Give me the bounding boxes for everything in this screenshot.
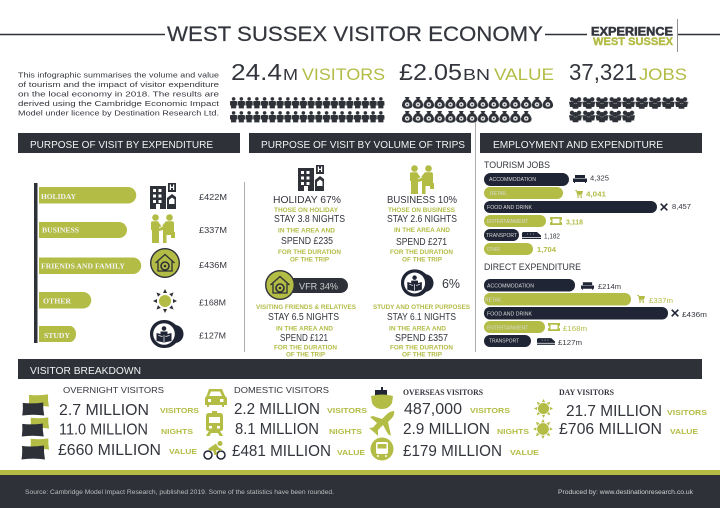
icon: hotel bbox=[298, 165, 324, 191]
overnight visitors: 2.7 MILLION bbox=[59, 402, 149, 419]
intro text bbox=[18, 70, 219, 118]
spend bar: accommodation: £214m bbox=[598, 282, 621, 291]
stat: visitors: M bbox=[283, 67, 298, 84]
icon: business bbox=[410, 165, 434, 194]
intro text: of tourism and the impact of visitor expenditure bbox=[18, 80, 219, 89]
job bar: accommodation bbox=[484, 173, 609, 186]
day visitors: DAY VISITORS bbox=[559, 387, 614, 397]
spend bar: entertainment: ENTERTAINMENT bbox=[487, 326, 529, 332]
stat: value: BN bbox=[463, 67, 490, 84]
bar: friends and family: FRIENDS AND FAMILY bbox=[41, 262, 126, 270]
business text: THOSE ON BUSINESS bbox=[388, 207, 455, 214]
job bar: transport bbox=[484, 229, 560, 241]
value: business: £337M bbox=[199, 225, 227, 235]
VFR text: STAY 6.5 NIGHTS bbox=[268, 312, 339, 323]
value: holiday: £422M bbox=[199, 192, 227, 202]
day visitors: VISITORS bbox=[667, 408, 707, 417]
holiday text: SPEND £235 bbox=[281, 236, 333, 247]
spend bar: food and drink: FOOD AND DRINK bbox=[487, 312, 533, 318]
domestic visitors bbox=[232, 385, 367, 460]
icon rows: staff groups bbox=[569, 97, 688, 124]
icon: sun bbox=[534, 399, 553, 418]
domestic visitors: £481 MILLION bbox=[232, 443, 331, 460]
icon rows: visitors bbox=[230, 97, 385, 123]
job bar: retail bbox=[484, 187, 606, 199]
stat: jobs bbox=[569, 59, 687, 85]
job bar: other: 1,704 bbox=[537, 245, 557, 254]
job bar: food and drink: 8,457 bbox=[672, 202, 691, 211]
overnight visitors bbox=[58, 385, 199, 459]
job bar: accommodation: 4,325 bbox=[590, 174, 609, 182]
logo: WEST SUSSEX bbox=[593, 36, 674, 48]
overseas visitors: £179 MILLION bbox=[403, 443, 502, 460]
job bar: food and drink: FOOD AND DRINK bbox=[487, 205, 533, 211]
VFR text: OF THE TRIP bbox=[286, 352, 325, 358]
job bar: retail: 4,041 bbox=[586, 190, 606, 198]
spend bar: entertainment: £168m bbox=[563, 324, 587, 333]
overnight visitors: OVERNIGHT VISITORS bbox=[63, 385, 164, 395]
holiday text: STAY 3.8 NIGHTS bbox=[274, 214, 345, 225]
job bar: accommodation: ACCOMMODATION bbox=[489, 177, 536, 183]
producer credit: Produced by: www.destinationresearch.co.uk bbox=[558, 489, 694, 496]
spend bar: entertainment bbox=[484, 321, 587, 333]
stat: visitors: VISITORS bbox=[302, 66, 385, 84]
stat: value: VALUE bbox=[494, 66, 554, 84]
icon: ship bbox=[371, 387, 393, 409]
VFR text: FOR THE DURATION bbox=[274, 344, 338, 352]
business text: SPEND £271 bbox=[396, 237, 447, 248]
VFR text: IN THE AREA AND bbox=[276, 326, 334, 332]
bar: business: BUSINESS bbox=[42, 226, 79, 234]
overnight visitors: £660 MILLION bbox=[58, 442, 161, 459]
overseas visitors: NIGHTS bbox=[497, 427, 529, 436]
domestic visitors: DOMESTIC VISITORS bbox=[234, 385, 329, 395]
VFR text: VISITING FRIENDS & RELATIVES bbox=[256, 304, 356, 311]
panel: employment and expenditure bbox=[480, 133, 707, 347]
stat: jobs: 37,321 bbox=[569, 59, 637, 85]
overseas visitors: VISITORS bbox=[470, 406, 510, 415]
job bar: retail: RETAIL bbox=[490, 191, 507, 197]
domestic visitors: VALUE bbox=[337, 448, 365, 457]
icon: study bbox=[150, 320, 184, 348]
business text bbox=[387, 195, 457, 264]
icon: cyclist bbox=[204, 441, 225, 459]
holiday text: OF THE TRIP bbox=[290, 256, 329, 264]
job bar: other: OTHER bbox=[487, 247, 500, 253]
icons: pillows bbox=[22, 394, 49, 460]
spend bar: transport: £127m bbox=[558, 338, 582, 347]
domestic visitors: NIGHTS bbox=[329, 427, 362, 436]
job bar: entertainment: ENTERTAINMENT bbox=[487, 219, 529, 225]
logo bbox=[591, 26, 674, 48]
overnight visitors: VISITORS bbox=[160, 406, 199, 415]
business text: BUSINESS 10% bbox=[387, 195, 457, 206]
stat: jobs: JOBS bbox=[639, 66, 687, 84]
day visitors: 21.7 MILLION bbox=[566, 403, 662, 420]
heading bbox=[18, 359, 702, 379]
bar: business bbox=[39, 222, 127, 238]
heading bbox=[249, 133, 471, 153]
domestic visitors: 8.1 MILLION bbox=[235, 421, 319, 438]
overseas visitors: VALUE bbox=[510, 448, 539, 457]
study share: 6% bbox=[442, 276, 460, 291]
icon: car bbox=[205, 389, 227, 407]
spend bar: retail: RETAIL bbox=[485, 298, 502, 304]
subheading: direct expenditure: DIRECT EXPENDITURE bbox=[484, 262, 581, 273]
heading: PURPOSE OF VISIT BY EXPENDITURE bbox=[30, 140, 213, 151]
icon: sun bbox=[533, 419, 553, 439]
day visitors: VALUE bbox=[670, 427, 698, 436]
intro text: Model under licence by Destination Research Ltd. bbox=[18, 108, 219, 118]
icon: study bbox=[401, 269, 434, 297]
source note: Source: Cambridge Model Impact Research, published 2019. Some of the statistics have been rounded. bbox=[25, 489, 334, 496]
holiday text: FOR THE DURATION bbox=[278, 249, 342, 256]
job bar: entertainment bbox=[484, 215, 583, 227]
overnight visitors: NIGHTS bbox=[161, 427, 193, 436]
overseas visitors bbox=[403, 387, 539, 460]
holiday text: HOLIDAY 67% bbox=[273, 195, 341, 206]
job bar: food and drink bbox=[484, 201, 691, 213]
spend bar: transport: TRANSPORT bbox=[489, 338, 520, 344]
panel: purpose of visit by volume of trips bbox=[249, 133, 471, 358]
icon: rail circle bbox=[370, 438, 394, 460]
study text bbox=[373, 304, 470, 358]
VFR pill: VFR 34% bbox=[299, 282, 338, 292]
intro text: This infographic summarises the volume and value bbox=[18, 70, 219, 80]
spend bar: food and drink bbox=[484, 307, 707, 320]
stat: value bbox=[399, 59, 554, 85]
spend bar: retail: £337m bbox=[649, 296, 673, 305]
business text: OF THE TRIP bbox=[402, 256, 442, 264]
overseas visitors: OVERSEAS VISITORS bbox=[403, 387, 483, 397]
value: friends and family: £436M bbox=[199, 260, 227, 270]
overnight visitors: VALUE bbox=[169, 447, 197, 456]
spend bar: transport bbox=[484, 335, 582, 347]
VFR text bbox=[256, 304, 356, 358]
bar: friends and family bbox=[39, 258, 141, 274]
stat: visitors bbox=[231, 59, 385, 85]
stat: value: £2.05 bbox=[399, 59, 462, 85]
overnight visitors: 11.0 MILLION bbox=[59, 422, 148, 438]
business text: FOR THE DURATION bbox=[390, 249, 454, 256]
bar: other: OTHER bbox=[43, 296, 72, 306]
heading: EMPLOYMENT AND EXPENDITURE bbox=[493, 140, 663, 151]
domestic visitors: 2.2 MILLION bbox=[234, 401, 320, 418]
value: other: £168M bbox=[199, 298, 226, 308]
business text: IN THE AREA AND bbox=[394, 227, 451, 234]
title: WEST SUSSEX VISITOR ECONOMY bbox=[167, 23, 543, 46]
study text: IN THE AREA AND bbox=[389, 326, 447, 332]
holiday text: THOSE ON HOLIDAY bbox=[274, 207, 339, 214]
footer bbox=[0, 470, 720, 508]
icon: sun bbox=[153, 289, 177, 313]
icon rows: money bags bbox=[402, 97, 554, 124]
VFR text: SPEND £121 bbox=[280, 333, 328, 344]
spend bar: accommodation: ACCOMMODATION bbox=[487, 284, 534, 290]
spend bar: accommodation bbox=[484, 279, 621, 292]
study text: OF THE TRIP bbox=[402, 352, 442, 358]
holiday text: IN THE AREA AND bbox=[278, 228, 336, 234]
icon: home bbox=[150, 248, 180, 278]
holiday text bbox=[273, 195, 345, 264]
day visitors bbox=[559, 387, 707, 438]
spend bar: retail bbox=[484, 293, 673, 306]
heading: VISITOR BREAKDOWN bbox=[30, 366, 141, 377]
stat: visitors: 24.4 bbox=[231, 59, 282, 85]
subheading: tourism jobs: TOURISM JOBS bbox=[484, 160, 550, 171]
job bar: other bbox=[484, 243, 557, 255]
intro text: derived using the Cambridge Economic Impact bbox=[18, 99, 219, 108]
heading: PURPOSE OF VISIT BY VOLUME OF TRIPS bbox=[261, 140, 465, 151]
study text: STAY 6.1 NIGHTS bbox=[387, 312, 456, 323]
intro text: on the local economy in 2018. The results are bbox=[18, 90, 219, 98]
value: study: £127M bbox=[199, 330, 226, 340]
heading bbox=[18, 133, 240, 153]
icon: business bbox=[151, 214, 175, 243]
bar: study bbox=[39, 326, 76, 342]
icon: hotel bbox=[150, 183, 176, 209]
panel: purpose of visit by expenditure bbox=[18, 133, 240, 348]
overseas visitors: 2.9 MILLION bbox=[403, 421, 490, 438]
icon: train bbox=[206, 411, 223, 436]
panel: visitor breakdown bbox=[18, 359, 707, 460]
bar: study: STUDY bbox=[44, 331, 71, 340]
job bar: transport: TRANSPORT bbox=[486, 233, 518, 239]
heading bbox=[480, 133, 702, 153]
domestic visitors: VISITORS bbox=[327, 406, 367, 415]
bar: holiday: HOLIDAY bbox=[41, 192, 77, 201]
job bar: transport: 1,182 bbox=[544, 232, 560, 240]
study text: STUDY AND OTHER PURPOSES bbox=[373, 304, 470, 311]
day visitors: £706 MILLION bbox=[559, 421, 662, 438]
logo: EXPERIENCE bbox=[591, 26, 673, 38]
VFR pill bbox=[265, 270, 348, 300]
job bar: entertainment: 3,118 bbox=[566, 218, 583, 226]
bar: other bbox=[39, 292, 91, 308]
business text: STAY 2.6 NIGHTS bbox=[387, 214, 457, 225]
study text: FOR THE DURATION bbox=[390, 344, 454, 352]
overseas visitors: 487,000 bbox=[404, 401, 462, 418]
study text: SPEND £357 bbox=[395, 333, 448, 344]
bar: holiday bbox=[39, 187, 136, 204]
spend bar: food and drink: £436m bbox=[682, 310, 707, 319]
icon: plane bbox=[369, 411, 394, 436]
